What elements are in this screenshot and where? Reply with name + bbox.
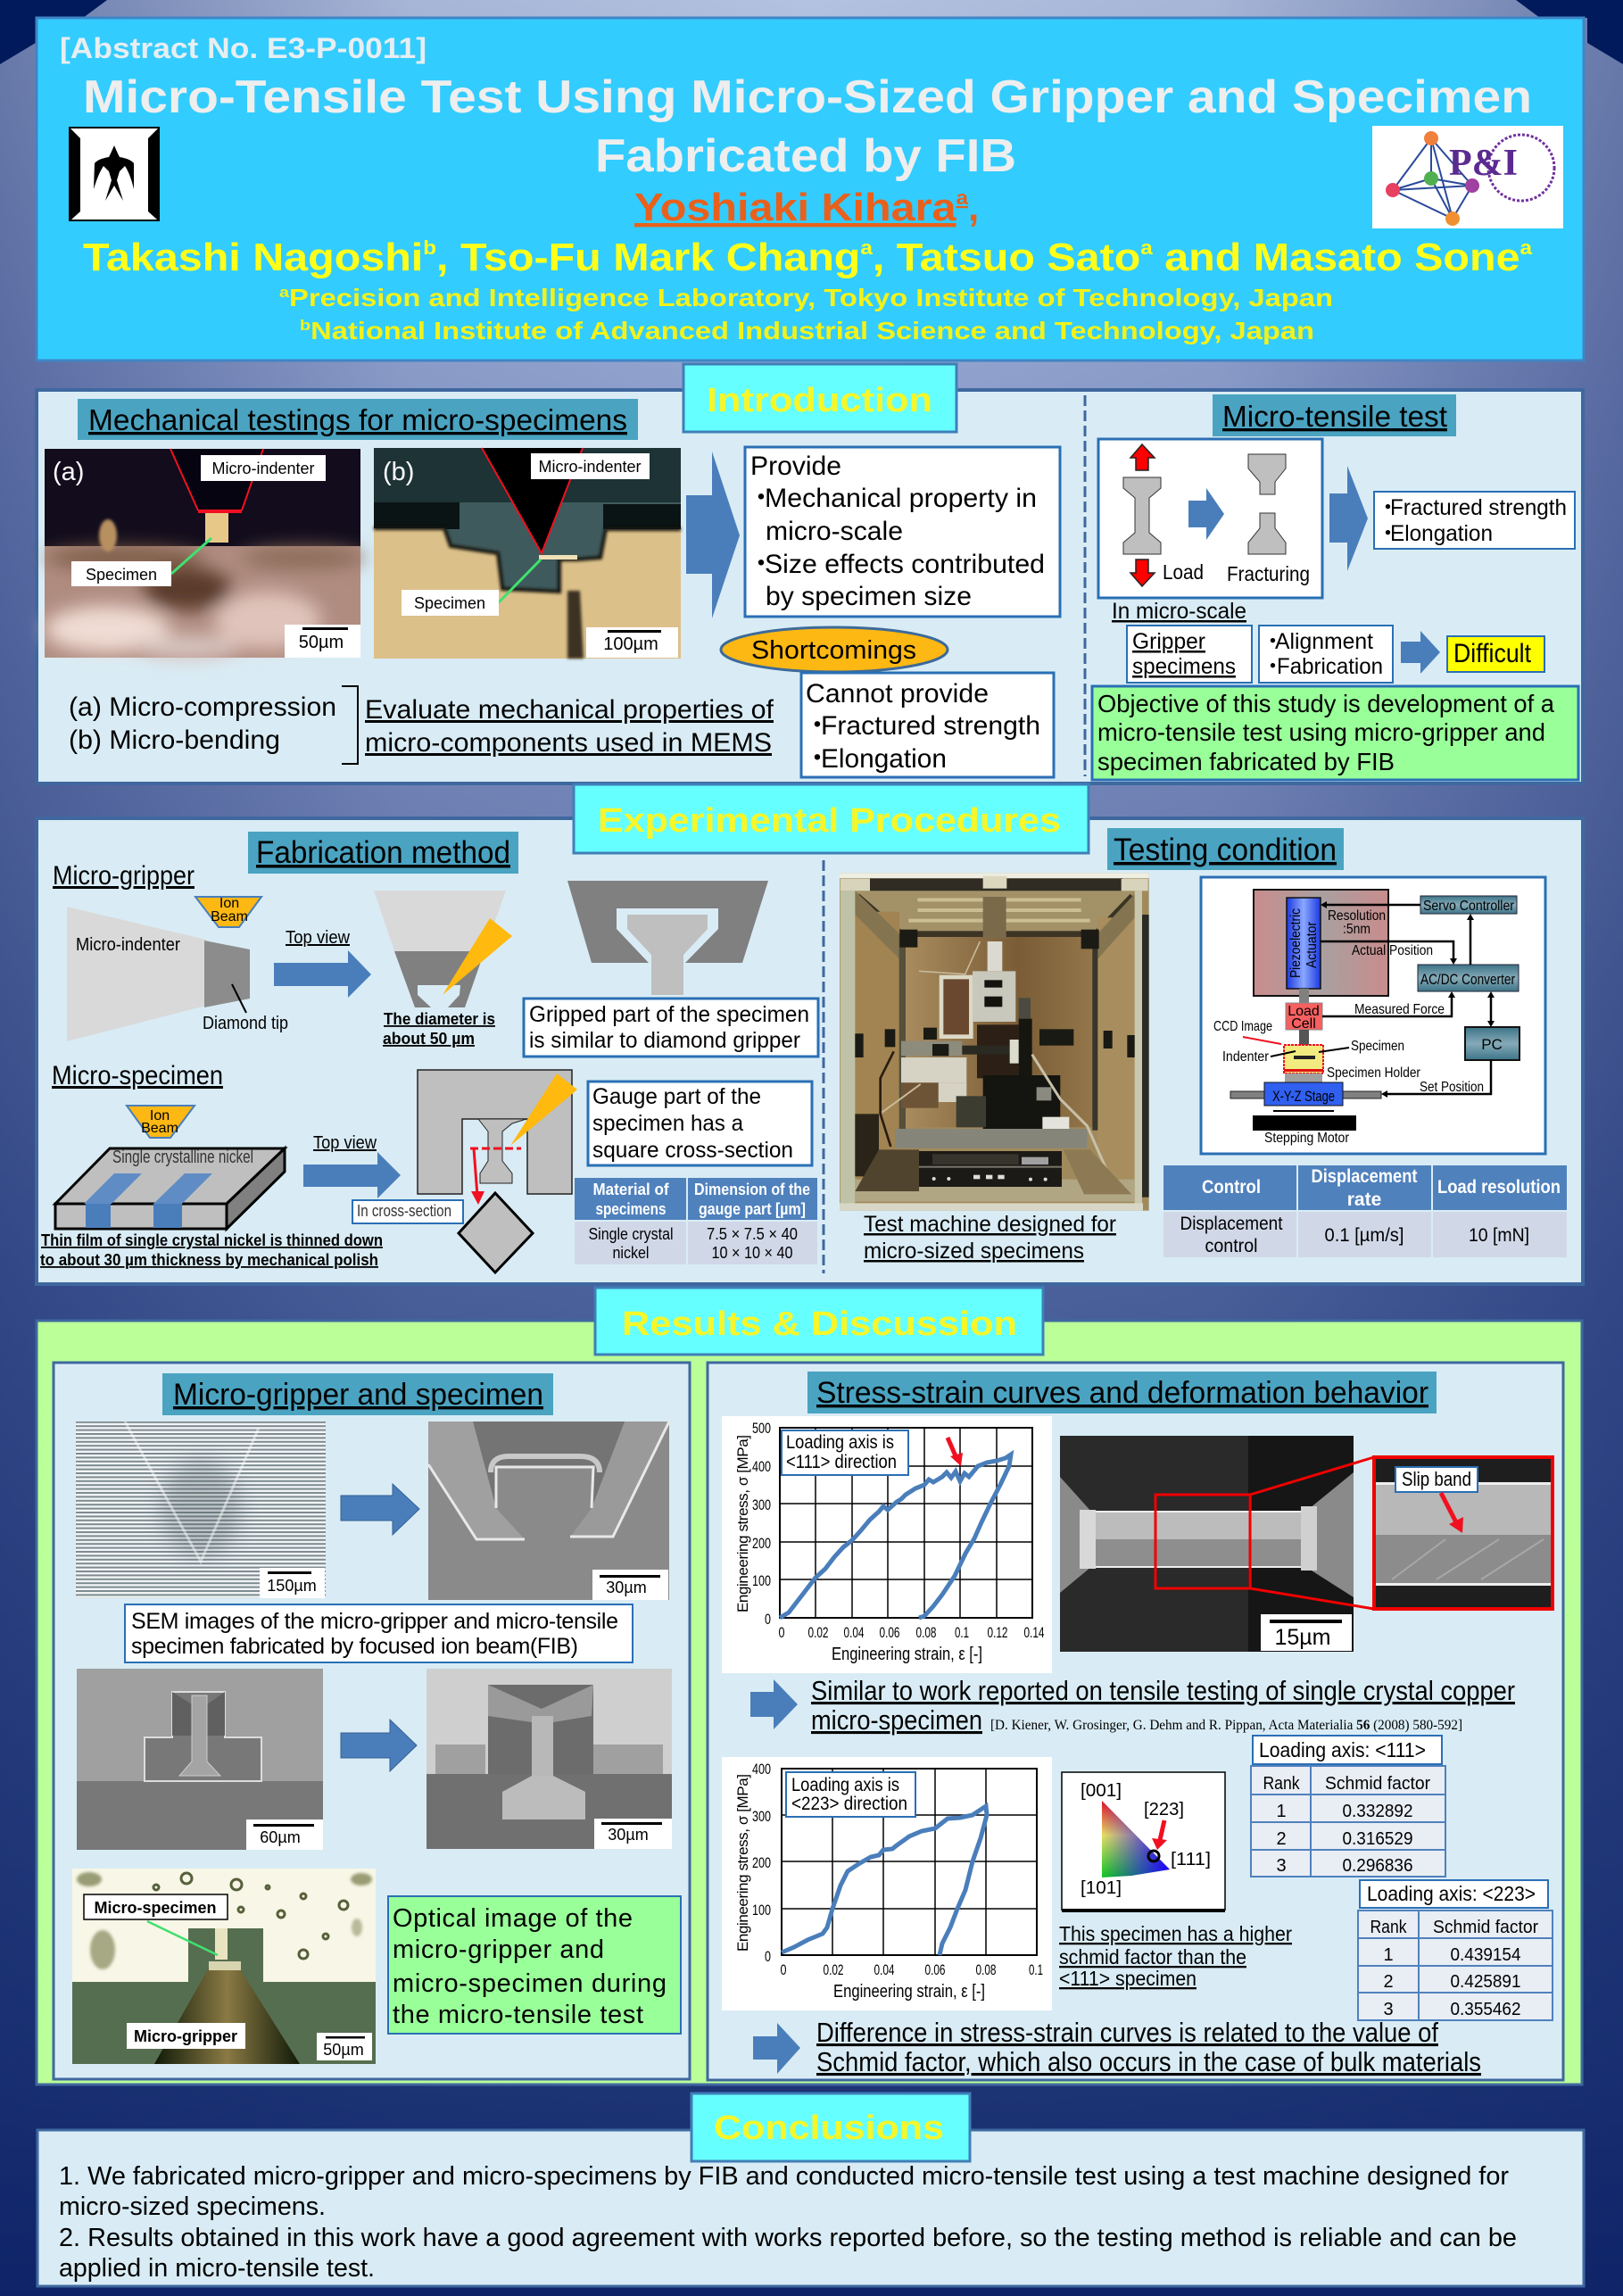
SEM image: slip bands	[1060, 1436, 1374, 1652]
chart: stress-strain curve, 111 axis	[722, 1416, 1052, 1673]
heading: conclusions tab	[691, 2093, 970, 2161]
diagram: testing apparatus schematic: CCD Image	[1213, 1019, 1272, 1034]
chart: stress-strain curve, 111 axis: 200	[752, 1535, 771, 1552]
SEM image: fabricated specimen	[426, 1669, 672, 1849]
chart: stress-strain curve, 111 axis: 300	[752, 1496, 771, 1513]
chart: stress-strain curve, 223 axis: 0.04	[874, 1961, 894, 1978]
affiliations	[279, 284, 1333, 344]
table: specimen materials: Single crystal	[589, 1225, 673, 1243]
diagram: testing apparatus schematic: Specimen Holder	[1327, 1065, 1421, 1081]
diagram: testing apparatus schematic: Indenter	[1222, 1049, 1270, 1065]
affiliations: b	[300, 317, 311, 334]
diagram: testing apparatus schematic: X-Y-Z Stage	[1272, 1088, 1335, 1105]
callout: difficult: Difficult	[1453, 639, 1532, 668]
photo (a): micro-compression: Micro-indenter	[211, 460, 315, 477]
table: schmid factors 111	[1251, 1766, 1445, 1877]
affiliations: Precision and Intelligence Laboratory, Tokyo Institute of Technology, Japan	[289, 284, 1333, 311]
SEM image: fabricated specimen: 30µm	[608, 1826, 649, 1844]
diagram: nickel film with ion beam: Thin film of single crystal nickel is thinned down	[41, 1231, 383, 1249]
callout: shortcomings: Shortcomings	[751, 636, 916, 665]
table: specimen materials: 10 × 10 × 40	[712, 1244, 792, 1262]
diagram: specimen top view and cross-section	[352, 1070, 577, 1272]
callout: optical image: the micro-tensile test	[393, 2001, 643, 2029]
SEM image: slip bands: 15µm	[1274, 1625, 1331, 1650]
text: higher schmid factor: schmid factor than the	[1059, 1945, 1246, 1969]
heading: conclusions tab: Conclusions	[714, 2110, 944, 2147]
photo (b): micro-bending: Micro-indenter	[538, 458, 642, 476]
photo (b): micro-bending: 100µm	[603, 634, 658, 654]
callout: alignment, fabrication: Alignment	[1275, 629, 1373, 654]
table: testing parameters: 10 [mN]	[1469, 1225, 1529, 1246]
table: schmid factors 111: Schmid factor	[1325, 1774, 1430, 1794]
table: schmid factors 223: Rank	[1370, 1918, 1407, 1937]
text: conclusion 2: applied in micro-tensile test.	[59, 2254, 375, 2283]
table: specimen materials: specimens	[596, 1200, 666, 1218]
callout: cannot provide: Fractured strength	[821, 711, 1040, 741]
conclusion: similar to reported work	[750, 1675, 1515, 1736]
diagram: inverse pole figure: [101]	[1081, 1878, 1122, 1898]
table: schmid factors 111: Rank	[1263, 1774, 1300, 1794]
callout: provide: Mechanical property in	[765, 484, 1037, 513]
diagram: load and fracture: Load	[1163, 560, 1204, 584]
chart: stress-strain curve, 111 axis: Engineering stress, σ [MPa]	[734, 1435, 751, 1612]
callout: optical image: micro-gripper and	[393, 1935, 604, 1964]
table: specimen materials: Material of	[592, 1181, 669, 1198]
callout: gauge part: specimen has a	[592, 1111, 743, 1136]
chart: stress-strain curve, 223 axis: 0	[765, 1948, 771, 1965]
table: schmid factors 111: 1	[1276, 1802, 1287, 1821]
arrow: top view of gripper	[274, 928, 371, 998]
arrow: specimen milling	[341, 1720, 417, 1771]
callout: optical image	[388, 1896, 681, 2034]
table: schmid factors 111: 0.296836	[1342, 1856, 1413, 1876]
callout: alignment, fabrication: ・	[1262, 654, 1284, 679]
callout: alignment, fabrication: ・	[1262, 629, 1284, 654]
callout: fractured strength, elongation: ・	[1377, 495, 1399, 520]
arrow: top view of gripper: Top view	[286, 928, 351, 948]
chart: stress-strain curve, 111 axis: 0.1	[955, 1624, 969, 1641]
chart: stress-strain curve, 111 axis: 100	[752, 1572, 771, 1589]
callout: study objective: micro-tensile test using micro-gripper and	[1097, 718, 1545, 746]
table: testing parameters: Displacement	[1312, 1166, 1417, 1187]
callout: gripper specimens: Gripper	[1132, 629, 1205, 654]
text: higher schmid factor: This specimen has a higher	[1059, 1922, 1292, 1945]
diagram: testing apparatus schematic: Resolution	[1328, 908, 1386, 924]
SEM image: specimen before testing	[77, 1669, 323, 1850]
title: Micro-Tensile Test Using Micro-Sized Gripper and Specimen	[83, 71, 1532, 123]
text: test methods: (a) Micro-compression	[69, 692, 336, 722]
chart: stress-strain curve, 111 axis: 0.14	[1024, 1624, 1044, 1641]
co-authors: , Tatsuo Sato	[873, 236, 1140, 279]
diagram: testing apparatus schematic: Servo Controller	[1423, 899, 1515, 914]
logo: P&I laboratory	[1372, 126, 1563, 228]
SEM image: fabricated gripper: 30µm	[606, 1579, 647, 1596]
arrow: to difficult	[1401, 631, 1440, 674]
chart: stress-strain curve, 111 axis: 0.06	[880, 1624, 899, 1641]
chart: stress-strain curve, 111 axis: 0.08	[915, 1624, 937, 1641]
arrow: top view of specimen	[303, 1133, 401, 1198]
table: specimen materials: nickel	[612, 1244, 650, 1262]
callout: cannot provide: ・	[804, 711, 831, 741]
diagram: inverse pole figure: [001]	[1081, 1781, 1122, 1801]
text: machine caption	[864, 1212, 1116, 1264]
callout: provide: by specimen size	[766, 582, 972, 611]
table: schmid factors 223: 1	[1383, 1945, 1394, 1965]
diagram: micro-indenter with ion beam: Ion	[219, 896, 239, 911]
chart: stress-strain curve, 223 axis: Engineering stress, σ [MPa]	[734, 1774, 751, 1952]
chart: stress-strain curve, 111 axis: 400	[752, 1458, 771, 1475]
callout: study objective	[1092, 686, 1578, 780]
diagram: testing apparatus schematic: Stepping Motor	[1264, 1131, 1350, 1146]
chart: stress-strain curve, 223 axis	[722, 1757, 1052, 2010]
diagram: inverse pole figure: [223]	[1144, 1800, 1184, 1819]
chart: stress-strain curve, 111 axis: <111> direction	[786, 1452, 897, 1472]
conclusion: similar to reported work: Similar to work reported on tensile testing of single crystal copper	[811, 1675, 1515, 1706]
text: micro-gripper label: Micro-gripper	[53, 861, 195, 891]
chart: stress-strain curve, 111 axis: 0.02	[808, 1624, 828, 1641]
heading: micro-gripper and specimen: Micro-gripper and specimen	[173, 1378, 543, 1412]
panel: results and discussion	[37, 1288, 1582, 2085]
conclusion: schmid factor relation: Difference in stress-strain curves is related to the value of	[816, 2017, 1438, 2048]
photo: optical image of gripper and specimen	[72, 1869, 376, 2064]
SEM image: enlarged slip band	[1374, 1457, 1553, 1609]
text: higher schmid factor	[1059, 1922, 1292, 1990]
table: specimen materials: 7.5 × 7.5 × 40	[707, 1225, 798, 1243]
diagram: nickel film with ion beam	[40, 1106, 383, 1269]
text: test methods	[69, 686, 358, 764]
chart: stress-strain curve, 223 axis: 200	[752, 1854, 771, 1871]
abstract number: [Abstract No. E3-P-0011]	[60, 32, 426, 64]
chart: stress-strain curve, 111 axis: 500	[752, 1420, 771, 1437]
co-authors: a	[1520, 236, 1533, 259]
chart: stress-strain curve, 223 axis: 0.06	[924, 1961, 946, 1978]
photo (b): micro-bending	[374, 448, 681, 659]
diagram: testing apparatus schematic	[1201, 877, 1545, 1154]
chart: stress-strain curve, 111 axis: Loading axis is	[786, 1432, 894, 1453]
chart: stress-strain curve, 111 axis: Engineering strain, ε [-]	[832, 1645, 982, 1664]
callout: cannot provide	[801, 673, 1054, 777]
photo (a): micro-compression	[45, 449, 366, 659]
heading: stress-strain curves: Stress-strain curves and deformation behavior	[816, 1376, 1428, 1410]
title: Fabricated by FIB	[595, 130, 1016, 182]
photo: optical image of gripper and specimen: Micro-specimen	[94, 1899, 217, 1917]
table: specimen materials	[575, 1178, 817, 1264]
diagram: inverse pole figure	[1062, 1772, 1225, 1911]
SEM image: specimen before testing: 60µm	[260, 1828, 301, 1846]
callout: alignment, fabrication: Fabrication	[1277, 654, 1383, 679]
arrow: gripper milling	[341, 1484, 419, 1535]
co-authors: Takashi Nagoshi	[83, 236, 392, 279]
table: schmid factors 223: 0.355462	[1451, 2000, 1520, 2019]
heading: introduction tab	[683, 364, 956, 432]
logo: P&I laboratory: P&I	[1449, 143, 1518, 184]
label: loading axis 111: Loading axis: <111>	[1259, 1738, 1426, 1761]
text: evaluate MEMS: micro-components used in MEMS	[365, 728, 772, 758]
callout: cannot provide: Cannot provide	[806, 679, 989, 709]
diagram: gripped specimen	[567, 881, 768, 995]
diagram: testing apparatus schematic: :5nm	[1343, 922, 1370, 937]
callout: provide: micro-scale	[766, 517, 903, 546]
text: conclusion 2	[59, 2224, 1517, 2283]
caption: SEM images: SEM images of the micro-gripper and micro-tensile	[131, 1609, 618, 1634]
diagram: gripper top view	[374, 891, 512, 1048]
diagram: nickel film with ion beam: Single crystalline nickel	[112, 1148, 253, 1167]
table: specimen materials: gauge part [µm]	[699, 1200, 806, 1218]
text: conclusion 1: micro-sized specimens.	[59, 2192, 326, 2221]
label: loading axis 223: Loading axis: <223>	[1367, 1882, 1536, 1905]
callout: fractured strength, elongation: Fractured strength	[1390, 495, 1567, 520]
callout: alignment, fabrication	[1259, 626, 1393, 683]
callout: provide: ・	[748, 484, 774, 513]
chart: stress-strain curve, 223 axis: 400	[752, 1761, 771, 1778]
table: schmid factors 223: 3	[1383, 2000, 1394, 2019]
panel: title header: ,	[968, 186, 979, 229]
table: testing parameters: Displacement	[1180, 1214, 1283, 1234]
callout: gauge part: Gauge part of the	[592, 1084, 761, 1109]
heading: testing condition: Testing condition	[1114, 833, 1337, 867]
panel: micro-gripper and specimen	[54, 1363, 690, 2079]
diagram: testing apparatus schematic: Actual Position	[1352, 943, 1433, 958]
callout: fractured strength, elongation: Elongation	[1390, 521, 1493, 546]
conclusion: schmid factor relation	[753, 2017, 1481, 2077]
callout: cannot provide: Elongation	[821, 744, 947, 774]
text: evaluate MEMS	[365, 695, 774, 758]
text: evaluate MEMS: Evaluate mechanical properties of	[365, 695, 774, 725]
callout: fractured strength, elongation: ・	[1377, 521, 1399, 546]
table: schmid factors 223: 0.425891	[1451, 1972, 1520, 1992]
arrow: to fractured strength	[1329, 466, 1368, 571]
table: testing parameters: 0.1 [µm/s]	[1324, 1225, 1404, 1246]
diagram: testing apparatus schematic: Measured Force	[1354, 1002, 1445, 1017]
heading: mechanical testings: Mechanical testings for micro-specimens	[88, 403, 627, 436]
chart: stress-strain curve, 223 axis: 0.02	[823, 1961, 844, 1978]
panel: conclusions	[37, 2093, 1584, 2286]
text: conclusion 1	[59, 2162, 1509, 2221]
chart: stress-strain curve, 223 axis: 0.1	[1029, 1961, 1043, 1978]
table: schmid factors 111: 3	[1276, 1856, 1287, 1876]
table: specimen materials: Dimension of the	[694, 1181, 810, 1198]
panel: title header	[37, 18, 1584, 361]
diagram: testing apparatus schematic: Set Position	[1420, 1080, 1484, 1095]
heading: results tab: Results & Discussion	[622, 1305, 1017, 1343]
co-authors: a	[1140, 236, 1154, 259]
diagram: gripper top view: about 50 µm	[383, 1030, 475, 1048]
callout: shortcomings	[721, 627, 948, 672]
text: micro-specimen label: Micro-specimen	[52, 1061, 223, 1090]
chart: stress-strain curve, 223 axis: 0	[780, 1961, 787, 1978]
SEM image: fabricated gripper	[428, 1422, 669, 1600]
heading: results tab	[595, 1288, 1043, 1355]
table: schmid factors 223: 0.439154	[1451, 1945, 1520, 1965]
photo (a): micro-compression: (a)	[53, 458, 84, 486]
caption: SEM images	[125, 1604, 633, 1662]
heading: fabrication method: Fabrication method	[256, 835, 510, 870]
photo (b): micro-bending: Specimen	[414, 594, 485, 612]
chart: stress-strain curve, 111 axis: 0	[778, 1624, 785, 1641]
table: schmid factors 111: 0.316529	[1342, 1829, 1413, 1849]
callout: gripped part: is similar to diamond gripper	[529, 1028, 800, 1053]
chart: stress-strain curve, 111 axis: 0	[765, 1611, 771, 1628]
text: conclusion 2: 2. Results obtained in this work have a good agreement with works reported before, so the testing method is reliable and can be	[59, 2224, 1517, 2252]
text: conclusion 1: 1. We fabricated micro-gripper and micro-specimens by FIB and conducted micro-tensile test using a test machine designed for	[59, 2162, 1509, 2191]
diagram: micro-indenter with ion beam: Micro-indenter	[76, 935, 180, 955]
diagram: micro-indenter with ion beam: Beam	[211, 909, 248, 924]
photo (b): micro-bending: (b)	[383, 458, 414, 486]
diagram: inverse pole figure: [111]	[1171, 1850, 1211, 1869]
heading: micro-tensile test: Micro-tensile test	[1222, 400, 1447, 433]
diagram: testing apparatus schematic: Load	[1288, 1004, 1320, 1019]
SEM image: gripper before milling: 150µm	[267, 1577, 317, 1595]
panel: stress-strain curves	[708, 1363, 1563, 2080]
text: in micro-scale: In micro-scale	[1112, 599, 1246, 624]
diagram: nickel film with ion beam: Beam	[141, 1121, 178, 1136]
conclusion: schmid factor relation: Schmid factor, which also occurs in the case of bulk materials	[816, 2046, 1481, 2077]
callout: provide: ・	[748, 550, 774, 579]
callout: optical image: Optical image of the	[393, 1904, 633, 1933]
chart: stress-strain curve, 223 axis: <223> direction	[791, 1794, 907, 1814]
diagram: testing apparatus schematic: Specimen	[1351, 1039, 1404, 1054]
callout: study objective: specimen fabricated by FIB	[1097, 748, 1395, 775]
affiliations: a	[279, 284, 290, 301]
callout: study objective: Objective of this study is development of a	[1097, 690, 1554, 717]
heading: experimental procedures tab	[574, 784, 1089, 853]
table: schmid factors 223: Schmid factor	[1433, 1918, 1538, 1937]
title	[83, 71, 1532, 182]
arrow: top view of specimen: Top view	[313, 1133, 377, 1153]
chart: stress-strain curve, 111 axis: 0.04	[844, 1624, 864, 1641]
chart: stress-strain curve, 223 axis: 300	[752, 1808, 771, 1825]
chart: stress-strain curve, 223 axis: Engineering strain, ε [-]	[833, 1982, 985, 2002]
diagram: specimen top view and cross-section: In cross-section	[357, 1202, 451, 1220]
photo: optical image of gripper and specimen: Micro-gripper	[134, 2027, 237, 2045]
diagram: micro-indenter with ion beam	[67, 896, 288, 1041]
diagram: testing apparatus schematic: Cell	[1291, 1016, 1316, 1032]
chart: stress-strain curve, 223 axis: Loading axis is	[791, 1775, 899, 1795]
co-authors: , Tso-Fu Mark Chang	[436, 236, 860, 279]
table: testing parameters: Control	[1202, 1177, 1261, 1198]
callout: provide: Size effects contributed	[765, 550, 1045, 579]
callout: gripper specimens: specimens	[1132, 654, 1236, 679]
logo: university	[69, 127, 160, 221]
diagram: micro-indenter with ion beam: Diamond tip	[203, 1014, 288, 1033]
presenting author: Yoshiaki Kihara	[634, 186, 926, 229]
SEM image: enlarged slip band: Slip band	[1402, 1468, 1471, 1490]
heading: experimental procedures tab: Experimental Procedures	[598, 802, 1061, 840]
callout: fractured strength, elongation	[1374, 492, 1575, 549]
presenting author: a	[956, 186, 969, 209]
table: schmid factors 111: 2	[1276, 1829, 1287, 1849]
photo: optical image of gripper and specimen: 50µm	[323, 2041, 364, 2059]
callout: provide	[745, 447, 1060, 617]
callout: gauge part	[588, 1082, 812, 1165]
callout: gripped part: Gripped part of the specimen	[529, 1002, 809, 1027]
co-authors: b	[423, 236, 436, 259]
conclusion: similar to reported work: micro-specimen	[811, 1704, 982, 1736]
callout: optical image: micro-specimen during	[393, 1969, 667, 1998]
table: testing parameters: control	[1205, 1236, 1258, 1256]
diagram: testing apparatus schematic: PC	[1481, 1036, 1503, 1053]
panel: experimental procedures	[37, 784, 1583, 1284]
panel: introduction	[37, 364, 1583, 783]
diagram: load and fracture	[1098, 439, 1322, 598]
co-authors: a	[860, 236, 874, 259]
table: schmid factors 223: 2	[1383, 1972, 1394, 1992]
photo (a): micro-compression: 50µm	[299, 633, 344, 652]
diagram: gripper top view: The diameter is	[384, 1010, 495, 1028]
text: test methods: (b) Micro-bending	[69, 725, 280, 755]
diagram: load and fracture: Fracturing	[1227, 562, 1310, 585]
callout: gripped part	[524, 999, 818, 1057]
callout: provide: Provide	[750, 452, 841, 481]
callout: gauge part: square cross-section	[592, 1138, 793, 1163]
table: testing parameters	[1163, 1165, 1567, 1257]
chart: stress-strain curve, 111 axis: 0.12	[987, 1624, 1008, 1641]
co-authors: and Masato Sone	[1153, 236, 1520, 279]
callout: cannot provide: ・	[804, 744, 831, 774]
diagram: nickel film with ion beam: to about 30 µm thickness by mechanical polish	[40, 1251, 378, 1269]
SEM image: gripper before milling	[76, 1422, 326, 1598]
diagram: testing apparatus schematic: Actuator	[1304, 921, 1320, 968]
text: machine caption: Test machine designed for	[864, 1212, 1116, 1237]
table: testing parameters: rate	[1347, 1189, 1381, 1210]
text: machine caption: micro-sized specimens	[864, 1239, 1084, 1264]
heading: introduction tab: Introduction	[707, 382, 932, 419]
diagram: testing apparatus schematic: AC/DC Converter	[1420, 971, 1515, 988]
caption: SEM images: specimen fabricated by focused ion beam(FIB)	[131, 1634, 578, 1659]
photo: test machine	[840, 873, 1149, 1211]
chart: stress-strain curve, 223 axis: 100	[752, 1902, 771, 1919]
chart: stress-strain curve, 223 axis: 0.08	[976, 1961, 996, 1978]
text: higher schmid factor: <111> specimen	[1059, 1967, 1197, 1990]
arrow: testings to provide	[686, 452, 740, 618]
table: schmid factors 111: 0.332892	[1342, 1802, 1413, 1821]
diagram: testing apparatus schematic: Piezoelectric	[1288, 908, 1304, 978]
photo (a): micro-compression: Specimen	[86, 566, 157, 584]
conclusion: similar to reported work: [D. Kiener, W. Grosinger, G. Dehm and R. Pippan, Acta Materialia 56 (2008) 580-592]	[990, 1718, 1462, 1733]
affiliations: National Institute of Advanced Industrial Science and Technology, Japan	[311, 317, 1314, 344]
callout: gripper specimens	[1127, 626, 1252, 683]
table: testing parameters: Load resolution	[1437, 1177, 1561, 1198]
table: schmid factors 223	[1358, 1911, 1553, 2020]
diagram: nickel film with ion beam: Ion	[150, 1108, 170, 1123]
